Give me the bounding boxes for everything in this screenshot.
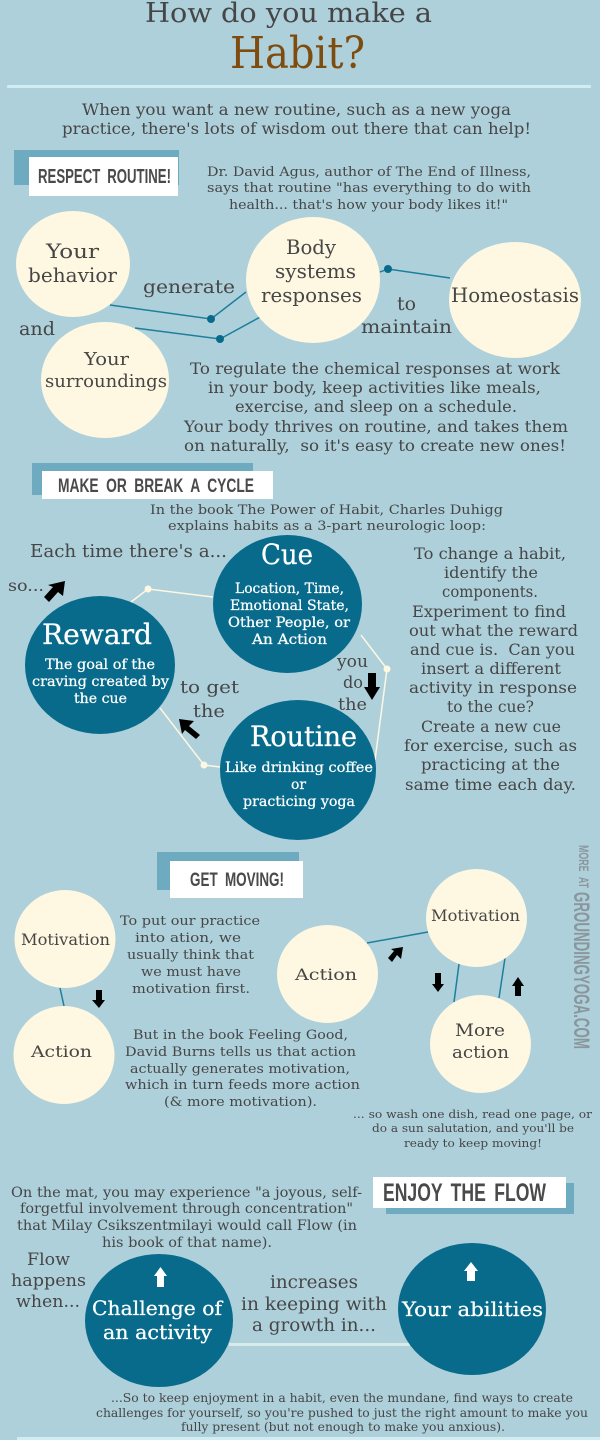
- body text: regulate responses: in your body, keep activities like meals,: [208, 378, 541, 397]
- circle: routine: Routine: [250, 720, 357, 753]
- connector lines: [60, 932, 505, 1006]
- connector words: maintain: [361, 316, 452, 338]
- intro text: [62, 101, 531, 138]
- heading: make or break a cycle: [32, 463, 273, 499]
- circle: homeostasis: [449, 242, 581, 358]
- text: keep enjoyment: challenges for yourself, so you're pushed to just the right amount to make you: [96, 1406, 588, 1420]
- text: on the mat: [11, 1185, 362, 1251]
- circle: motivation, right: Motivation: [431, 907, 520, 925]
- loop words: [8, 541, 368, 722]
- connector words: [19, 276, 452, 340]
- text: wash one dish: ... so wash one dish, read one page, or: [353, 1107, 593, 1121]
- circle: motivation: Motivation: [21, 931, 110, 949]
- text: wash one dish: ready to keep moving!: [404, 1136, 542, 1150]
- body text: regulate responses: exercise, and sleep on a schedule.: [235, 397, 517, 416]
- text: feeling good: actually generates motivation,: [130, 1062, 350, 1077]
- circle: cue: Cue: [261, 538, 313, 571]
- circle: your behavior: [16, 211, 130, 317]
- quote from Dr. David Agus: Dr. David Agus, author of The End of Illness,: [207, 165, 531, 180]
- circle: motivation, right: [426, 869, 527, 967]
- text: motivation first: we must have: [141, 965, 241, 980]
- connector words: to: [397, 293, 416, 315]
- circle: your surroundings: Your: [83, 349, 129, 370]
- side text: changing a habit: [404, 545, 578, 794]
- side text: changing a habit: for exercise, such as: [404, 737, 577, 755]
- loop words: to get: [180, 677, 240, 698]
- circle: your abilities: [398, 1243, 546, 1375]
- arrow: action to motivation: [388, 947, 403, 962]
- text: feeling good: (& more motivation).: [164, 1095, 317, 1110]
- title: [145, 0, 432, 79]
- quote from Dr. David Agus: [207, 165, 532, 213]
- circle: routine: practicing yoga: [243, 794, 355, 810]
- intro: 3-part loop: In the book The Power of Habit, Charles Duhigg: [150, 503, 503, 518]
- loop words: do: [343, 673, 363, 693]
- text: on the mat: forgetful involvement through concentration": [20, 1201, 353, 1217]
- circle: reward: the cue: [74, 691, 127, 707]
- side text: changing a habit: same time each day.: [405, 776, 576, 794]
- side text: changing a habit: identify the: [444, 564, 538, 582]
- circle: reward: Reward: [42, 618, 152, 651]
- title: Habit?: [230, 28, 365, 79]
- circle: cue: Other People, or: [228, 615, 351, 631]
- text: keep enjoyment: fully present (but not enough to make you anxious).: [181, 1420, 505, 1434]
- heading: enjoy the flow: [373, 1177, 574, 1214]
- circle: challenge of an activity: Challenge of: [92, 1296, 224, 1320]
- circle: homeostasis: Homeostasis: [451, 283, 579, 307]
- circle: cue: An Action: [251, 632, 327, 648]
- text: wash one dish: [353, 1107, 593, 1150]
- circle: challenge of an activity: an activity: [103, 1320, 213, 1344]
- intro: 3-part loop: explains habits as a 3-part neurologic loop:: [168, 519, 486, 534]
- circle: body systems responses: [246, 217, 380, 343]
- arrow: to cue: [44, 581, 65, 602]
- circle: cue: [213, 535, 362, 673]
- text: on the mat: that Milay Csikszentmilayi would call Flow (in: [17, 1218, 357, 1234]
- circle: action: [14, 1006, 114, 1104]
- loop words: the: [193, 701, 225, 722]
- circle: your behavior: behavior: [28, 263, 117, 287]
- text: on the mat: On the mat, you may experience "a joyous, self-: [11, 1185, 362, 1201]
- text: feeling good: which in turn feeds more action: [125, 1078, 361, 1093]
- text: flow happens when: [11, 1250, 86, 1312]
- intro: 3-part loop: [150, 503, 503, 534]
- arrow: motivation to more action: [432, 973, 444, 992]
- text: motivation first: [120, 914, 260, 997]
- side text: changing a habit: to the cue?: [447, 698, 534, 716]
- text: increases in keeping with: [241, 1273, 387, 1336]
- side credit: more at groundingyoga.com: GROUNDINGYOGA.COM: [569, 892, 594, 1049]
- body text: regulate responses: To regulate the chemical responses at work: [190, 359, 560, 378]
- connector words: generate: [143, 276, 235, 298]
- intro text: When you want a new routine, such as a new yoga: [82, 101, 511, 119]
- side text: changing a habit: components.: [442, 583, 538, 601]
- text: feeling good: [125, 1028, 361, 1110]
- loop words: the: [338, 695, 367, 715]
- circle: more action: action: [452, 1043, 509, 1063]
- heading: make or break a cycle: MAKE OR BREAK A CYCLE: [58, 476, 254, 497]
- side text: changing a habit: Create a new cue: [421, 718, 561, 736]
- text: motivation first: usually think that: [127, 948, 255, 963]
- quote from Dr. David Agus: says that routine "has everything to do with: [207, 181, 532, 196]
- intro text: practice, there's lots of wisdom out there that can help!: [62, 120, 531, 138]
- side text: changing a habit: out what the reward: [409, 622, 578, 640]
- connector lines: [110, 265, 450, 343]
- side text: changing a habit: insert a different: [421, 660, 562, 678]
- side text: changing a habit: practicing at the: [421, 756, 560, 774]
- heading: get moving: GET MOVING!: [190, 870, 284, 891]
- side text: changing a habit: To change a habit,: [414, 545, 566, 563]
- panel: get moving: [14, 852, 593, 1150]
- circle: routine: Like drinking coffee: [225, 760, 373, 776]
- circle: action, right: [277, 925, 378, 1023]
- circle: challenge of an activity: [85, 1254, 233, 1387]
- circle: reward: [25, 596, 175, 734]
- circle: your behavior: Your: [45, 239, 100, 263]
- circle: more action: More: [455, 1021, 505, 1041]
- body text: regulate responses: Your body thrives on routine, and takes them: [183, 417, 568, 436]
- body text: regulate responses: on naturally, so it's easy to create new ones!: [184, 436, 566, 455]
- side text: changing a habit: Experiment to find: [412, 603, 566, 621]
- circle: your abilities: Your abilities: [401, 1297, 543, 1321]
- text: flow happens when: Flow: [27, 1250, 70, 1270]
- text: motivation first: into ation, we: [135, 931, 241, 946]
- circle: routine: or: [291, 777, 307, 793]
- arrow: motivation to action: [92, 990, 105, 1008]
- panel: respect routine: [14, 150, 581, 455]
- text: increases in keeping with: increases: [270, 1273, 358, 1293]
- circle: reward: craving created by: [32, 674, 169, 690]
- circle: action: Action: [30, 1042, 92, 1061]
- loop words: you: [336, 652, 368, 672]
- heading: respect routine: [14, 150, 179, 196]
- body text: regulate responses: [183, 359, 568, 455]
- connector words: and: [19, 318, 55, 340]
- heading: respect routine: RESPECT ROUTINE!: [38, 166, 171, 188]
- text: increases in keeping with: a growth in...: [252, 1316, 376, 1336]
- text: motivation first: motivation first.: [132, 982, 250, 997]
- panel: make or break a cycle: [8, 463, 578, 840]
- circle: your surroundings: surroundings: [45, 371, 167, 392]
- loop connector lines: [131, 586, 390, 768]
- text: keep enjoyment: [96, 1391, 588, 1434]
- text: keep enjoyment: ...So to keep enjoyment in a habit, even the mundane, find ways to create: [111, 1391, 573, 1405]
- circle: routine: [220, 700, 376, 840]
- circle: motivation: [14, 890, 116, 988]
- arrow: to routine: [364, 673, 380, 700]
- circle: body systems responses: responses: [261, 283, 362, 307]
- circle: cue: Emotional State,: [230, 598, 349, 614]
- circle: action, right: Action: [294, 965, 357, 984]
- quote from Dr. David Agus: health... that's how your body likes it!": [229, 198, 508, 213]
- text: flow happens when: happens: [11, 1271, 86, 1291]
- text: flow happens when: when...: [16, 1292, 80, 1312]
- circle: reward: The goal of the: [45, 657, 155, 673]
- circle: cue: Location, Time,: [235, 581, 344, 597]
- text: feeling good: But in the book Feeling Good,: [133, 1028, 348, 1043]
- text: increases in keeping with: in keeping with: [241, 1295, 387, 1315]
- circle: more action: [430, 995, 531, 1093]
- side credit: more at groundingyoga.com: [569, 845, 594, 1049]
- heading: get moving: [157, 852, 303, 898]
- loop words: so...: [8, 576, 44, 595]
- text: feeling good: David Burns tells us that action: [125, 1045, 357, 1060]
- circle: body systems responses: Body: [286, 235, 337, 259]
- side credit: more at groundingyoga.com: MORE AT: [576, 845, 592, 888]
- loop words: Each time there's a...: [30, 541, 227, 562]
- text: on the mat: his book of that name).: [102, 1235, 272, 1251]
- circle: body systems responses: systems: [275, 259, 356, 283]
- side text: changing a habit: and cue is. Can you: [410, 641, 575, 659]
- arrow: more action to motivation: [512, 977, 524, 996]
- side text: changing a habit: activity in response: [409, 679, 577, 697]
- arrow: to reward: [179, 719, 200, 739]
- circle: your surroundings: [41, 322, 169, 438]
- text: motivation first: To put our practice: [120, 914, 260, 929]
- text: wash one dish: do a sun salutation, and you'll be: [372, 1121, 574, 1135]
- panel: enjoy the flow: [11, 1177, 588, 1434]
